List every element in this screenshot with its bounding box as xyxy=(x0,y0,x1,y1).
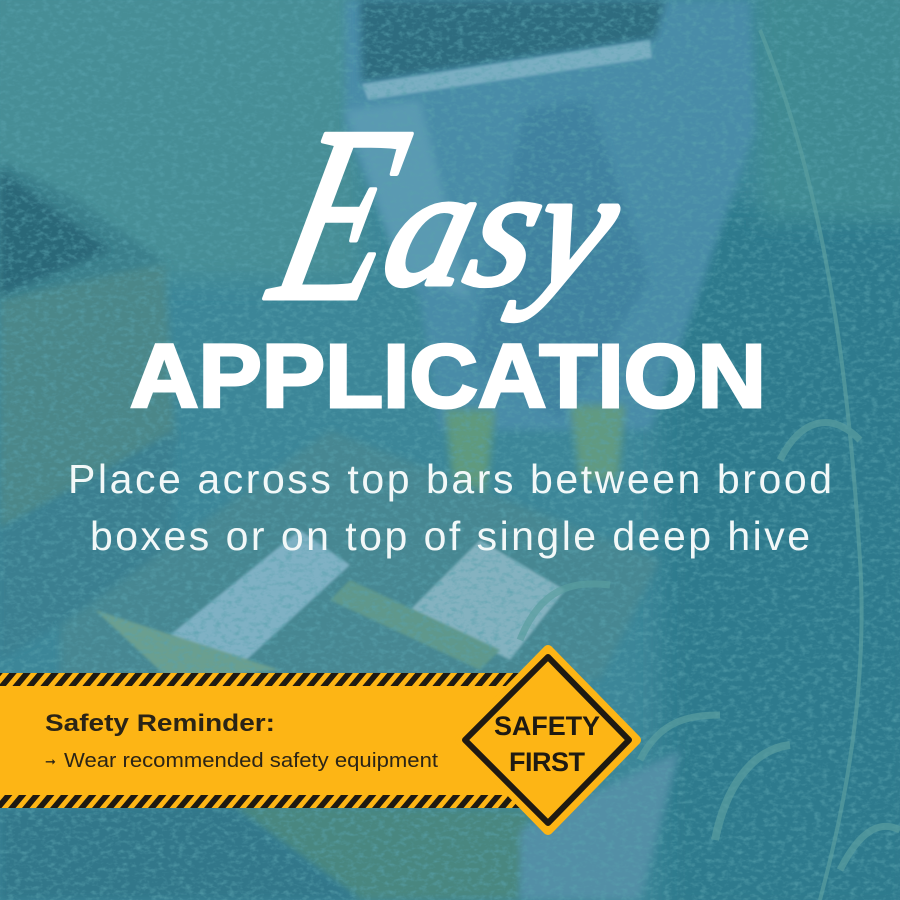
banner bullet: Wear recommended safety equipment xyxy=(64,750,438,772)
safety first sign: FIRST xyxy=(509,747,586,777)
sign text: SAFETY xyxy=(494,711,600,741)
title: Easy: E xyxy=(250,75,429,352)
title: Easy xyxy=(250,75,652,352)
safety first sign xyxy=(460,650,636,830)
banner fill xyxy=(0,686,530,795)
body text: Place across top bars between brood xyxy=(68,456,832,502)
hazard stripes bottom xyxy=(0,795,530,808)
grass blades xyxy=(520,30,900,900)
safety banner xyxy=(0,673,530,808)
beekeeper suit xyxy=(345,0,755,430)
banner heading: Safety Reminder: xyxy=(45,710,275,737)
heading: APPLICATION: APPLICATION xyxy=(130,327,766,427)
hive top bars xyxy=(60,430,660,680)
hive bottom box xyxy=(230,805,530,900)
hazard stripes top xyxy=(0,673,530,686)
title: Easy: asy xyxy=(368,133,637,321)
body text: boxes or on top of single deep hive xyxy=(90,513,810,559)
hive box left xyxy=(0,265,175,530)
body text xyxy=(68,456,832,559)
banner bullet: ➞ xyxy=(45,755,56,770)
